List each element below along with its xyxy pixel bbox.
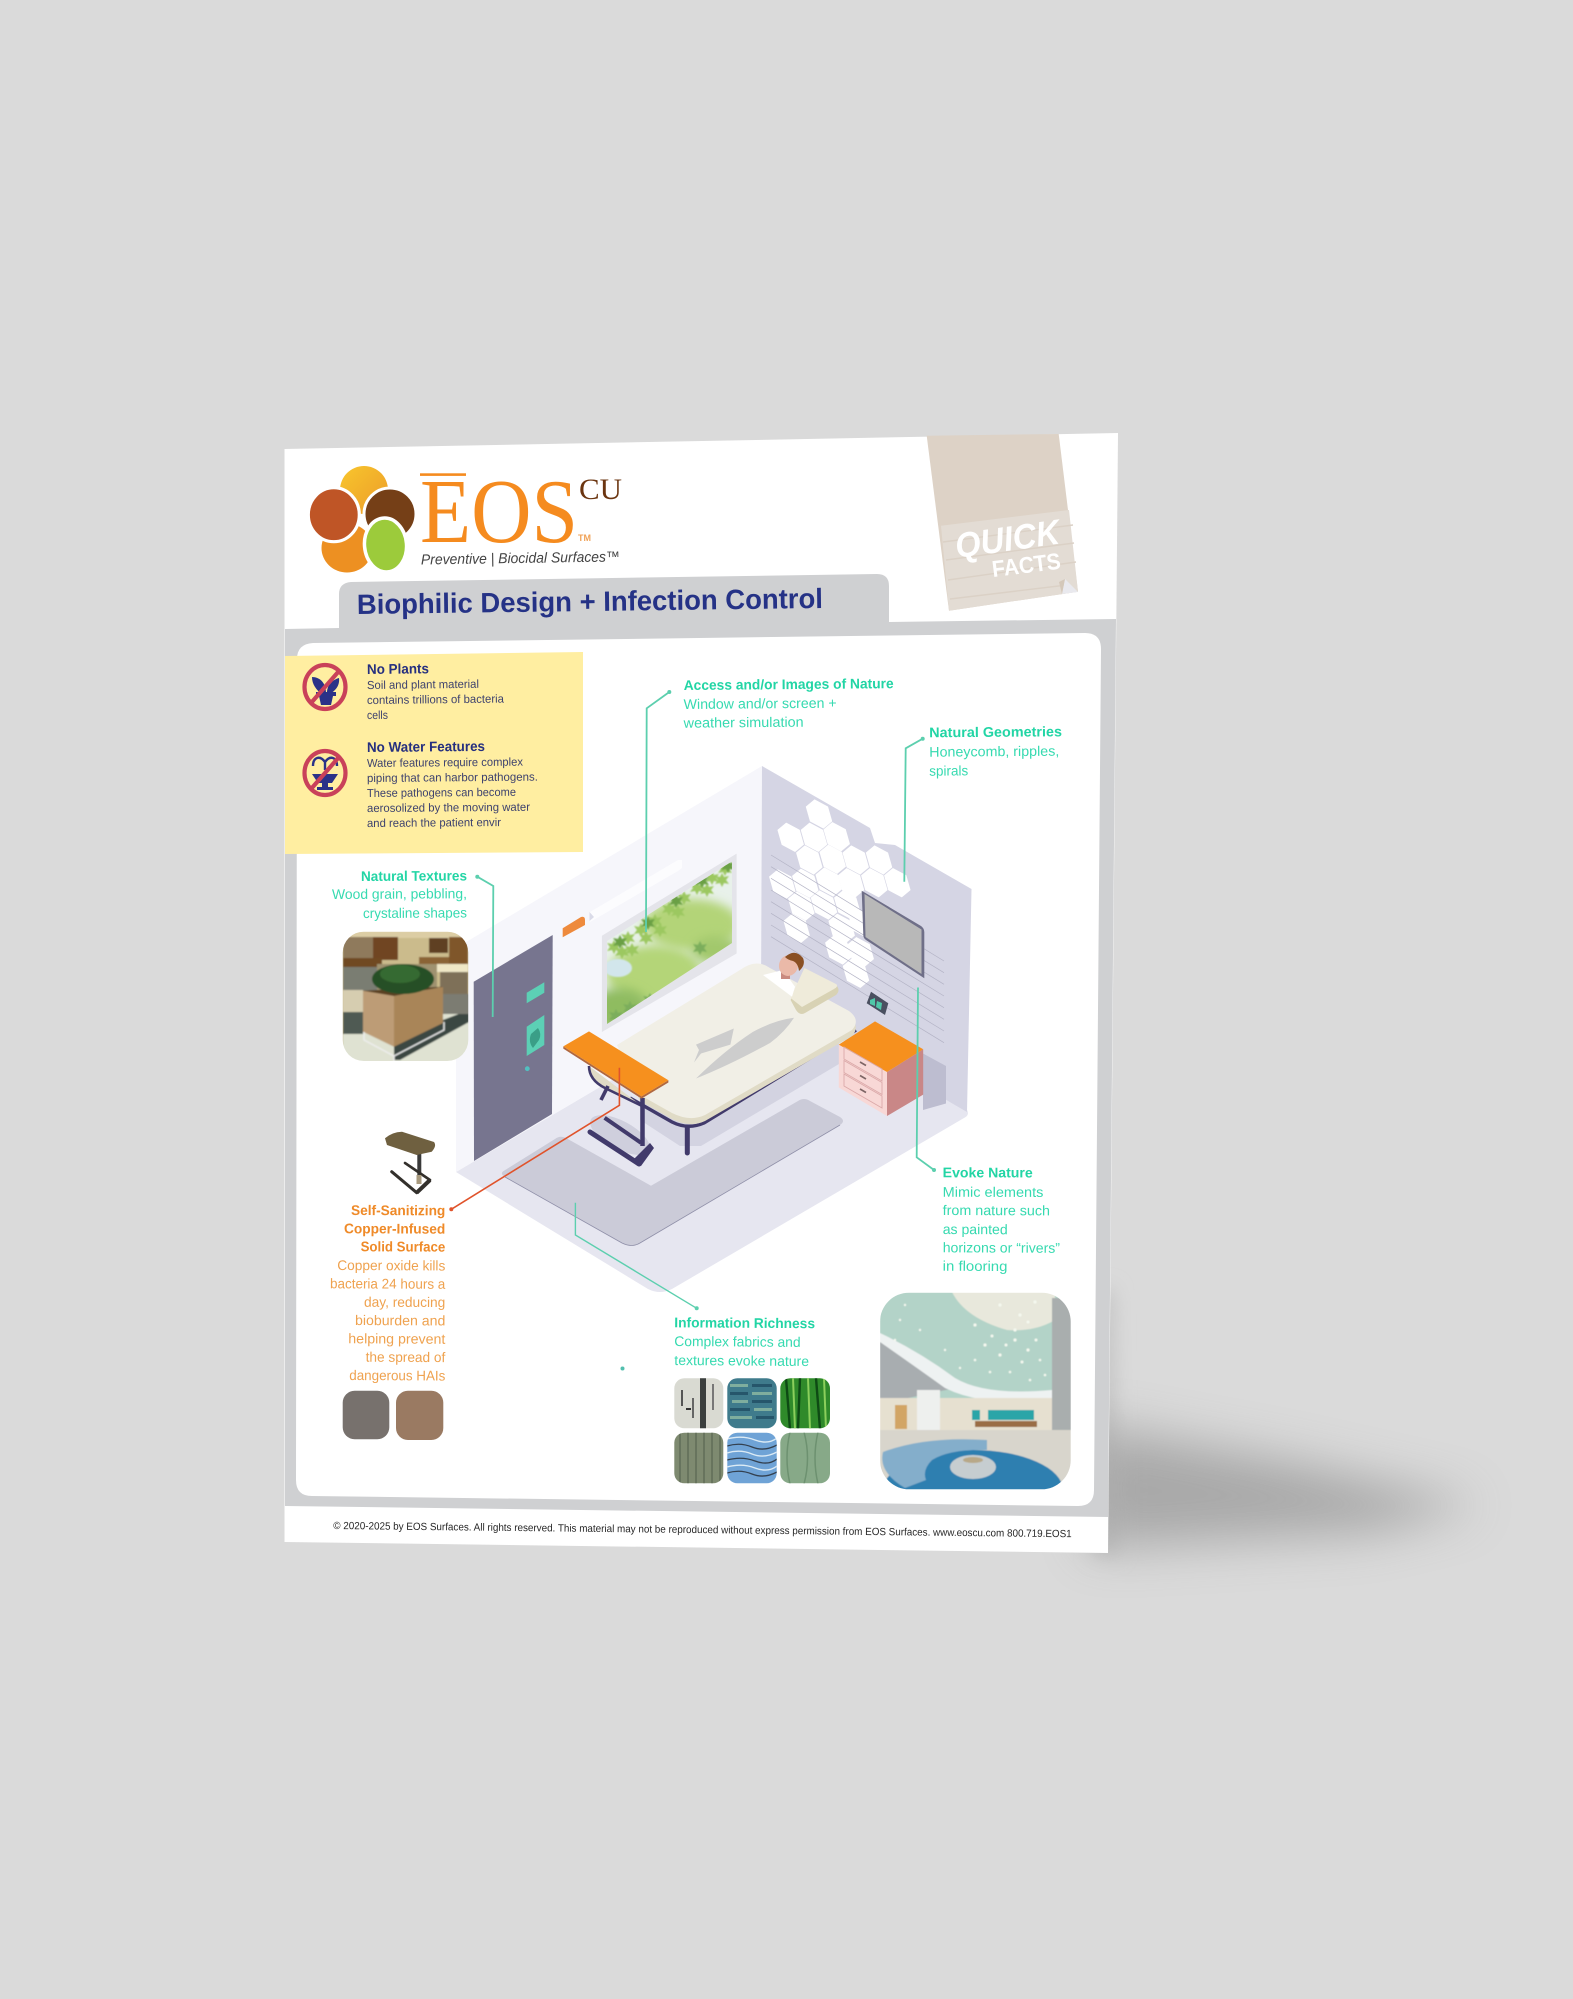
pillow bbox=[791, 968, 838, 1014]
no plants text: Soil and plant material bbox=[367, 679, 479, 692]
no water features text: piping that can harbor pathogens. bbox=[367, 772, 538, 785]
logo: EOS CU: EOS bbox=[420, 461, 578, 562]
logo: EOS CU: CU bbox=[579, 473, 622, 506]
right wall bbox=[761, 766, 972, 1112]
overbed table bbox=[563, 1031, 668, 1166]
rug bbox=[502, 1099, 843, 1246]
callout: evoke nature bbox=[917, 988, 1060, 1274]
no plants text: cells bbox=[367, 710, 388, 722]
callout: self-sanitizing copper-infused solid surface: helping prevent bbox=[348, 1330, 445, 1347]
title: Biophilic Design + Infection Control bbox=[357, 583, 823, 620]
copper surface swatches bbox=[343, 1391, 443, 1440]
left wall bbox=[456, 766, 762, 1172]
patient gown bbox=[763, 970, 795, 997]
bed blanket shadows bbox=[694, 1028, 734, 1062]
patient head bbox=[777, 953, 804, 979]
callout: natural geometries: spirals bbox=[929, 762, 968, 779]
table floor shadow bbox=[584, 1107, 656, 1163]
quick facts note bbox=[927, 434, 1078, 611]
callout: self-sanitizing copper-infused solid surface: Self-Sanitizing bbox=[351, 1202, 445, 1218]
floor bbox=[456, 992, 968, 1292]
wall light strip bbox=[590, 860, 682, 922]
swatch: sage bbox=[780, 1432, 830, 1484]
logo: EOS CU: Preventive | Biocidal Surfaces™ bbox=[421, 549, 620, 568]
callout: self-sanitizing copper-infused solid surface: Copper-Infused bbox=[344, 1220, 445, 1237]
swatch: water bbox=[727, 1432, 777, 1484]
printed sheet bbox=[284, 433, 1118, 1553]
callout: self-sanitizing copper-infused solid surface: Solid Surface bbox=[361, 1238, 446, 1255]
callout: access and/or images of nature: Access and/or Images of Nature bbox=[684, 675, 894, 693]
callout: self-sanitizing copper-infused solid surface: dangerous HAIs bbox=[349, 1367, 445, 1384]
quick facts note: QUICK bbox=[953, 512, 1065, 566]
callout: evoke nature: as painted bbox=[943, 1221, 1008, 1237]
bed shadow bbox=[640, 1036, 839, 1146]
orange wall sign bbox=[563, 912, 594, 937]
callout: natural geometries: Honeycomb, ripples, bbox=[929, 743, 1059, 760]
nightstand bbox=[839, 1021, 946, 1116]
wordmark bbox=[420, 473, 466, 476]
callout: natural textures: Wood grain, pebbling, bbox=[332, 885, 467, 902]
callout: access and/or images of nature: weather simulation bbox=[683, 714, 804, 731]
swatch: birch bark bbox=[674, 1378, 724, 1429]
callout: evoke nature: Evoke Nature bbox=[943, 1164, 1033, 1180]
door bbox=[474, 935, 553, 1161]
photo: lobby with planter bbox=[342, 931, 470, 1062]
callout: information richness: Information Richness bbox=[674, 1314, 815, 1331]
stray teal dot bbox=[620, 1366, 624, 1370]
painted horizon lines bbox=[771, 855, 944, 1043]
no water features text: aerosolized by the moving water bbox=[367, 802, 530, 815]
photo: hospital atrium bbox=[880, 1292, 1071, 1490]
photo: overbed table product bbox=[385, 1132, 435, 1193]
no plants text: No Plants bbox=[367, 660, 429, 677]
callout: information richness: textures evoke nature bbox=[674, 1352, 809, 1369]
callout: self-sanitizing copper-infused solid surface: bioburden and bbox=[355, 1312, 445, 1328]
honeycomb wall pattern bbox=[770, 800, 910, 988]
logo: EOS CU bbox=[308, 461, 622, 574]
icon: no plants bbox=[304, 665, 346, 709]
window with nature view bbox=[602, 854, 736, 1032]
callout: natural textures: Natural Textures bbox=[361, 867, 467, 884]
logo: EOS CU: TM bbox=[578, 533, 591, 543]
callout: natural textures: crystaline shapes bbox=[363, 905, 467, 921]
logo mark: five petals bbox=[308, 466, 416, 574]
wall screen bbox=[862, 891, 924, 978]
callout: natural textures bbox=[332, 867, 493, 1017]
callout: evoke nature: from nature such bbox=[943, 1202, 1050, 1218]
swatch: olive stripe bbox=[674, 1432, 724, 1484]
no water features text: These pathogens can become bbox=[367, 787, 516, 800]
callout: natural geometries bbox=[904, 723, 1062, 882]
fabric swatch grid bbox=[674, 1378, 830, 1484]
callout: information richness: Complex fabrics and bbox=[674, 1333, 801, 1350]
callout: natural geometries: Natural Geometries bbox=[929, 723, 1062, 740]
callout: access and/or images of nature: Window and/or screen + bbox=[684, 695, 837, 712]
(sheet grey band with title tab) bbox=[285, 574, 1116, 1517]
no water features text: and reach the patient envir bbox=[367, 817, 501, 830]
callout: self-sanitizing copper-infused solid surface bbox=[330, 1068, 619, 1384]
no water features text: Water features require complex bbox=[367, 757, 523, 770]
callout: self-sanitizing copper-infused solid surface: Copper oxide kills bbox=[337, 1257, 445, 1273]
callout: evoke nature: in flooring bbox=[943, 1258, 1007, 1274]
callout: self-sanitizing copper-infused solid surface: bacteria 24 hours a bbox=[330, 1275, 446, 1292]
swatch: green grass bbox=[780, 1378, 830, 1429]
panel: no plants / no water features bbox=[285, 652, 583, 854]
no water features text: No Water Features bbox=[367, 738, 485, 755]
icon: no water feature bbox=[304, 751, 346, 795]
hospital bed bbox=[617, 953, 856, 1153]
callout: evoke nature: horizons or “rivers” bbox=[943, 1239, 1060, 1256]
callout: information richness bbox=[575, 1203, 815, 1369]
callout: self-sanitizing copper-infused solid surface: day, reducing bbox=[364, 1294, 445, 1310]
callout: self-sanitizing copper-infused solid surface: the spread of bbox=[366, 1349, 445, 1365]
swatch: teal weave bbox=[727, 1378, 777, 1429]
footer: © 2020-2025 by EOS Surfaces. All rights reserved. This material may not be reproduced without express permission from EOS Surfaces. www.eoscu.com 800.719.EOS1 bbox=[333, 1520, 1072, 1540]
quick facts note: FACTS bbox=[990, 548, 1062, 582]
wall control panel bbox=[867, 992, 888, 1015]
callout: access and/or images of nature bbox=[646, 675, 894, 932]
no plants text bbox=[367, 660, 505, 722]
cast shadow of the sheet bbox=[1090, 1290, 1480, 1555]
no water features text bbox=[367, 738, 538, 830]
no plants text: contains trillions of bacteria bbox=[367, 694, 505, 707]
callout: evoke nature: Mimic elements bbox=[943, 1184, 1043, 1200]
isometric patient room bbox=[456, 766, 972, 1292]
